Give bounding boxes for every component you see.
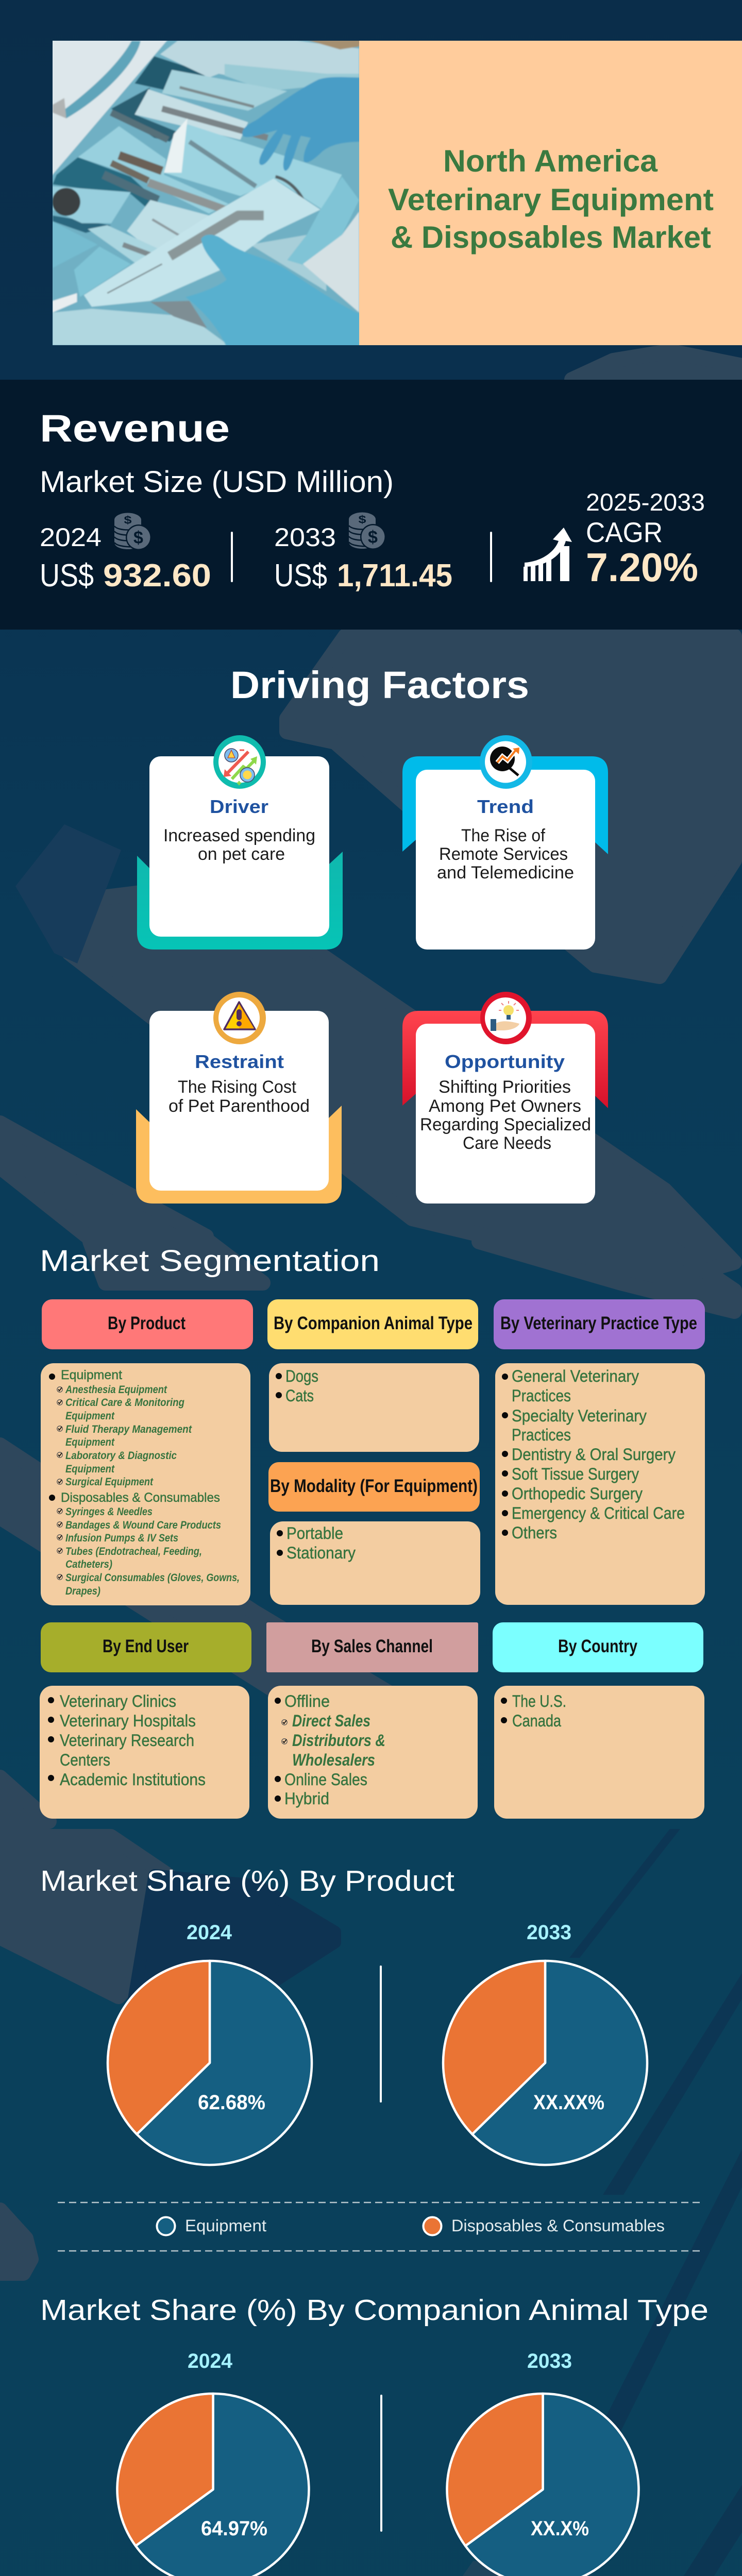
companion list (276, 1367, 318, 1405)
practice list: Practices (512, 1386, 571, 1405)
practice list: Others (512, 1523, 557, 1542)
product list (49, 1368, 240, 1597)
heading: market share by product: Market Share (%) By Product (40, 1865, 454, 1897)
modality list: Portable (286, 1524, 343, 1543)
product list: Laboratory & Diagnostic (65, 1450, 177, 1462)
restraint text: The Rising Cost (178, 1077, 297, 1097)
country list: Canada (512, 1711, 561, 1730)
product list: Bandages & Wound Care Products (65, 1519, 221, 1531)
end user list (48, 1692, 206, 1789)
product list: Disposables & Consumables (61, 1490, 220, 1505)
card: trend (402, 735, 608, 950)
heading: market segmentation: Market Segmentation (40, 1244, 380, 1278)
practice list: Dentistry & Oral Surgery (512, 1445, 676, 1464)
product list: Infusion Pumps & IV Sets (65, 1532, 178, 1544)
card: opportunity (402, 992, 608, 1204)
legend: product: Equipment (185, 2216, 266, 2235)
icon: growth arrow (524, 528, 572, 581)
product list: Syringes & Needles (65, 1506, 153, 1518)
practice header: By Veterinary Practice Type (500, 1313, 697, 1333)
modality list (277, 1524, 356, 1562)
sales list: Online Sales (284, 1770, 367, 1789)
driver text: Increased spending (163, 826, 315, 845)
panel: by sales channel (266, 1622, 478, 1819)
product list: Fluid Therapy Management (65, 1423, 192, 1435)
practice list: Specialty Veterinary (512, 1406, 647, 1425)
icon: restraint (213, 992, 266, 1044)
practice list: Emergency & Critical Care (512, 1504, 685, 1522)
practice list: Practices (512, 1426, 571, 1444)
panel: by veterinary practice type (494, 1299, 705, 1605)
sales list: Hybrid (284, 1789, 329, 1808)
sales list: Offline (284, 1692, 330, 1710)
2033 value: 1,711.45 (337, 558, 452, 594)
pie chart: companion 2033: XX.X% (531, 2517, 589, 2540)
heading: market share by companion animal type: Market Share (%) By Companion Animal Type (40, 2294, 709, 2327)
country header: By Country (558, 1636, 637, 1656)
practice list: General Veterinary (512, 1367, 639, 1385)
pie chart: product 2033: 2033 (527, 1921, 571, 1944)
icon: opportunity (480, 992, 532, 1044)
product list: Equipment (61, 1368, 122, 1382)
end user list: Veterinary Research (60, 1731, 194, 1750)
sales list (275, 1692, 385, 1808)
title: Veterinary Equipment (388, 182, 714, 217)
opportunity text: Care Needs (463, 1133, 551, 1153)
practice list (502, 1367, 685, 1542)
panel: by modality (268, 1462, 480, 1605)
end user list: Veterinary Clinics (60, 1692, 176, 1710)
product list: Equipment (65, 1436, 115, 1448)
practice list: Orthopedic Surgery (512, 1484, 643, 1503)
end user list: Academic Institutions (60, 1770, 206, 1789)
opportunity text: Regarding Specialized (420, 1115, 591, 1134)
2024 value: US$ (40, 558, 94, 594)
by product header: By Product (108, 1313, 185, 1333)
legend: product (157, 2216, 665, 2235)
opportunity text: Among Pet Owners (429, 1096, 581, 1116)
market size label: Market Size (USD Million) (40, 465, 394, 499)
title: & Disposables Market (391, 220, 711, 255)
revenue panel (0, 380, 742, 630)
trend text: and Telemedicine (437, 863, 574, 883)
product list: Surgical Consumables (Gloves, Gowns, (65, 1572, 240, 1584)
sales list: Direct Sales (292, 1711, 370, 1730)
CAGR: CAGR (586, 516, 663, 548)
2024 value: 2024 (40, 523, 102, 552)
pie chart: product 2024 (108, 1921, 312, 2165)
product list: Equipment (65, 1410, 115, 1422)
restraint text (168, 1077, 310, 1116)
pie chart: product 2024: 2024 (187, 1921, 232, 1944)
restraint text: of Pet Parenthood (168, 1096, 310, 1116)
CAGR: 7.20% (586, 545, 698, 590)
modality list: Stationary (286, 1544, 356, 1562)
pie chart: companion 2024 (117, 2350, 309, 2576)
country list (501, 1692, 566, 1730)
panel: by product (41, 1299, 253, 1605)
pie chart: companion 2024: 2024 (188, 2350, 233, 2372)
pie chart: companion 2033: 2033 (527, 2350, 572, 2372)
card: restraint (136, 992, 342, 1204)
2033 value: 2033 (274, 523, 336, 552)
end user list: Centers (60, 1751, 110, 1769)
icon: coins 2024 (114, 513, 151, 550)
trend text: Remote Services (439, 844, 568, 864)
icon: coins 2033 (349, 512, 386, 550)
revenue heading: Revenue (40, 407, 230, 450)
companion list: Cats (285, 1386, 314, 1405)
legend: product: Disposables & Consumables (451, 2216, 665, 2235)
2033 value (274, 523, 452, 594)
2033 value: US$ (274, 558, 327, 594)
2024 value: 932.60 (103, 558, 211, 594)
product list: Equipment (65, 1463, 115, 1475)
header image: gloved hands sorting sterile pouches (47, 35, 365, 351)
product list: Critical Care & Monitoring (65, 1397, 184, 1409)
end user header: By End User (103, 1636, 189, 1656)
end user list: Veterinary Hospitals (60, 1711, 196, 1730)
panel: by country (493, 1622, 704, 1819)
sales list: Distributors & (292, 1731, 385, 1750)
title panel (359, 41, 742, 345)
driver label: Driver (210, 796, 268, 817)
CAGR (586, 488, 705, 590)
opportunity text: Shifting Priorities (439, 1077, 571, 1097)
trend label: Trend (477, 796, 534, 817)
practice list: Soft Tissue Surgery (512, 1465, 639, 1483)
product list: Anesthesia Equipment (65, 1384, 167, 1396)
driver text: on pet care (198, 844, 285, 864)
pie chart: companion 2024: 64.97% (201, 2517, 267, 2540)
2024 value (40, 523, 211, 594)
trend text (437, 826, 574, 883)
restraint label: Restraint (195, 1051, 284, 1072)
country list: The U.S. (512, 1692, 566, 1710)
icon: driver (213, 735, 266, 789)
icon: trend (480, 735, 532, 789)
title (388, 144, 714, 255)
pie chart: companion 2033 (447, 2350, 638, 2576)
pie chart: product 2024: 62.68% (198, 2091, 265, 2114)
pie chart: product 2033: XX.XX% (533, 2091, 604, 2114)
driver text (163, 826, 315, 864)
product list: Tubes (Endotracheal, Feeding, (65, 1546, 202, 1557)
product list: Surgical Equipment (65, 1476, 154, 1488)
panel: by companion animal type (267, 1299, 479, 1452)
card: driver (137, 735, 343, 950)
trend text: The Rise of (461, 826, 546, 845)
product list: Catheters) (65, 1558, 112, 1570)
modality header: By Modality (For Equipment) (270, 1476, 478, 1496)
sales list: Wholesalers (292, 1751, 375, 1769)
pie chart: product 2033 (443, 1921, 647, 2165)
CAGR: 2025-2033 (586, 488, 705, 516)
heading: driving factors: Driving Factors (230, 664, 529, 706)
companion header: By Companion Animal Type (274, 1313, 473, 1333)
opportunity text (420, 1077, 591, 1153)
title: North America (443, 144, 658, 178)
companion list: Dogs (285, 1367, 318, 1385)
product list: Drapes) (65, 1585, 100, 1597)
panel: by end user (40, 1622, 251, 1819)
opportunity label: Opportunity (445, 1051, 565, 1072)
sales header: By Sales Channel (311, 1636, 433, 1656)
